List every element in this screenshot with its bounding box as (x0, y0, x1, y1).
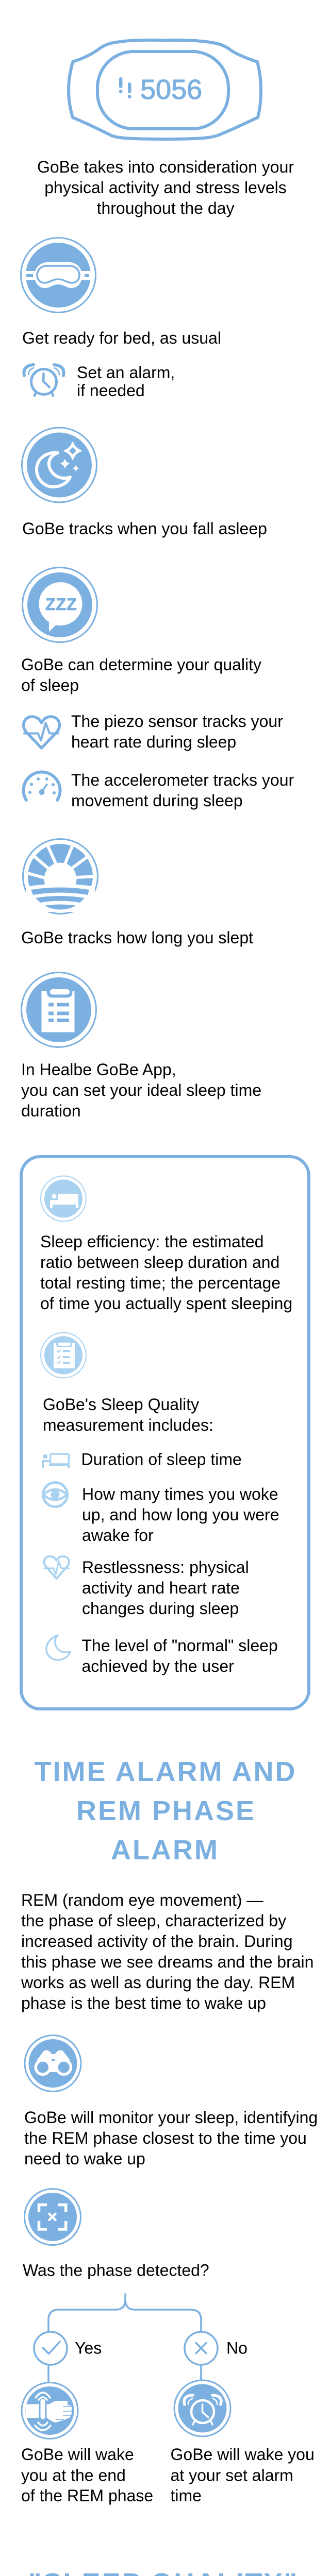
icon: clipboard (22, 973, 96, 1047)
flow connector (48, 2294, 201, 2382)
text: set an alarm (77, 363, 175, 400)
text: sleep efficiency: of time you actually spent sleeping (40, 1294, 292, 1313)
icon: gauge (23, 772, 60, 800)
text: quality of sleep (21, 655, 261, 694)
text: quality of sleep: GoBe can determine your quality (21, 655, 261, 674)
icon: wrist vibration (22, 2382, 78, 2439)
text: normal sleep: achieved by the user (81, 1657, 234, 1675)
text: sleep efficiency (40, 1232, 292, 1313)
text: yes outcome: of the REM phase (21, 2486, 153, 2505)
text: accelerometer (71, 771, 294, 810)
label: no: No (226, 2339, 248, 2358)
text: REM explanation: increased activity of the brain. During (21, 1932, 292, 1951)
text: REM explanation: works as well as during the day. REM (21, 1973, 295, 1992)
panel: sleep quality (21, 1157, 309, 1709)
text: accelerometer: The accelerometer tracks your (71, 771, 294, 789)
text: piezo sensor (71, 712, 283, 751)
icon: sunrise (23, 839, 98, 914)
text: monitor your sleep: the REM phase closest to the time you (24, 2129, 307, 2147)
text: accelerometer: movement during sleep (71, 791, 243, 810)
intro text: GoBe takes into consideration your (37, 158, 294, 176)
text: how many times: awake for (82, 1526, 154, 1545)
intro text: physical activity and stress levels (44, 178, 287, 197)
text: measurement includes: measurement includes: (43, 1416, 213, 1434)
text: sleep efficiency: Sleep efficiency: the estimated (40, 1232, 263, 1251)
text: measurement includes (43, 1395, 213, 1434)
text: REM explanation (21, 1891, 314, 2012)
icon: eye (43, 1483, 67, 1506)
text: how many times (82, 1485, 279, 1545)
icon: binoculars (25, 2035, 81, 2092)
icon: no cross (185, 2332, 218, 2365)
text: tracks when you fall asleep: GoBe tracks when you fall asleep (22, 519, 267, 538)
icon: small heart (44, 1556, 69, 1579)
text: no outcome: GoBe will wake you (170, 2445, 315, 2464)
label: yes: Yes (75, 2339, 102, 2358)
text: REM explanation: phase is the best time to wake up (21, 1994, 266, 2012)
text: monitor your sleep: GoBe will monitor your sleep, identifying (24, 2108, 318, 2127)
icon: sleep mask (21, 238, 96, 312)
icon: GoBe wristband: 5056 (140, 74, 202, 105)
heading: time alarm and REM phase alarm: ALARM (111, 1835, 219, 1866)
icon: yes check (34, 2332, 67, 2365)
text: monitor your sleep: need to wake up (24, 2149, 145, 2168)
text: ideal sleep time: you can set your ideal sleep time (21, 1081, 261, 1099)
icon: alarm clock (24, 365, 64, 396)
text: restlessness: changes during sleep (82, 1599, 239, 1618)
intro text (37, 158, 294, 217)
icon: checklist (41, 1332, 86, 1378)
text: piezo sensor: The piezo sensor tracks your (71, 712, 283, 731)
text: no outcome: at your set alarm (170, 2466, 293, 2484)
heading: time alarm and REM phase alarm: TIME ALARM AND (35, 1756, 296, 1787)
text: REM explanation: this phase we see dreams and the brain (21, 1953, 314, 1971)
text: restlessness (82, 1558, 249, 1618)
text: restlessness: Restlessness: physical (82, 1558, 249, 1577)
text: was the phase detected: Was the phase detected? (23, 2261, 209, 2279)
text: yes outcome: you at the end (21, 2466, 126, 2484)
text: normal sleep: The level of "normal" sleep (81, 1636, 278, 1655)
text: duration: Duration of sleep time (81, 1450, 242, 1468)
icon: moon and stars (22, 428, 97, 502)
heading: time alarm and REM phase alarm (35, 1756, 296, 1866)
icon: heart with pulse (24, 717, 59, 748)
text: yes outcome: GoBe will wake (21, 2445, 134, 2464)
text: ideal sleep time: duration (21, 1101, 81, 1120)
text: measurement includes: GoBe's Sleep Quality (43, 1395, 199, 1414)
heading: time alarm and REM phase alarm: REM PHASE (76, 1795, 256, 1826)
text: quality of sleep: of sleep (21, 676, 79, 694)
text: how many times: up, and how long you were (82, 1505, 279, 1524)
text: yes outcome (21, 2445, 153, 2505)
text: sleep efficiency: ratio between sleep duration and (40, 1253, 279, 1272)
text: REM explanation: the phase of sleep, characterized by (21, 1911, 286, 1930)
text: REM explanation: REM (random eye movement) — (21, 1891, 263, 1909)
text: how long you slept: GoBe tracks how long you slept (21, 928, 253, 947)
icon: small moon (46, 1635, 70, 1660)
text: ideal sleep time: In Healbe GoBe App, (21, 1060, 176, 1079)
text: how many times: How many times you woke (82, 1485, 278, 1503)
text: piezo sensor: heart rate during sleep (71, 733, 236, 751)
text: sleep efficiency: total resting time; the percentage (40, 1274, 280, 1292)
text: set an alarm: Set an alarm, (77, 363, 175, 382)
text: normal sleep (81, 1636, 278, 1675)
text: ideal sleep time (21, 1060, 261, 1120)
intro text: throughout the day (97, 199, 234, 217)
icon: zzz speech bubble (23, 568, 97, 642)
icon: GoBe wristband (69, 40, 261, 139)
icon: white alarm clock (174, 2380, 230, 2436)
text: no outcome (170, 2445, 315, 2505)
icon: small bed (43, 1454, 69, 1467)
icon: zzz speech bubble: ZZZ (45, 595, 77, 614)
icon: target detection (25, 2189, 80, 2245)
text: get ready: Get ready for bed, as usual (22, 329, 221, 347)
text: no outcome: time (170, 2486, 202, 2505)
text: monitor your sleep (24, 2108, 318, 2168)
text: restlessness: activity and heart rate (82, 1579, 240, 1597)
text: set an alarm: if needed (77, 381, 145, 400)
icon: bed (41, 1176, 86, 1221)
